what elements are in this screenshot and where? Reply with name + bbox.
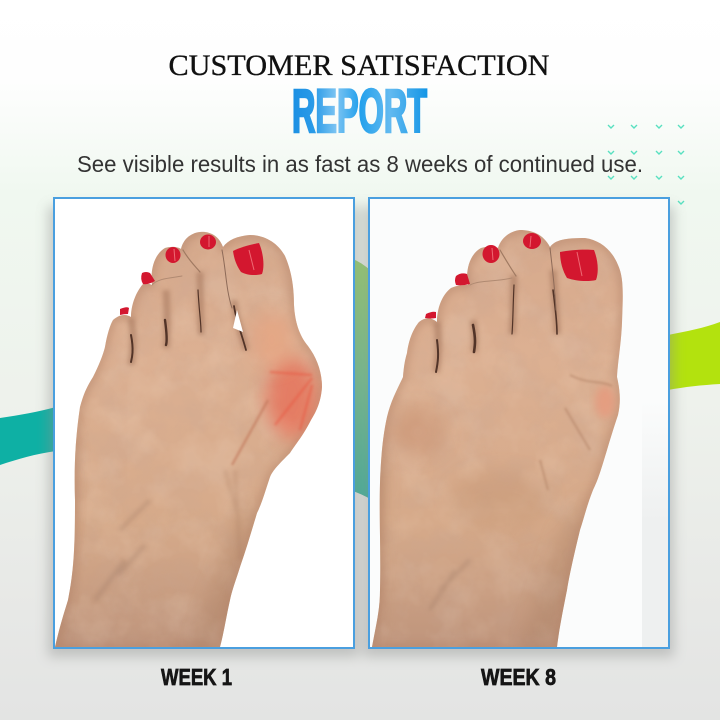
- panel: week 8: [362, 198, 669, 650]
- photo: foot with inflamed bunion: [48, 225, 330, 650]
- heading: report: REPORT: [292, 77, 427, 145]
- toenails: [425, 233, 598, 318]
- swoosh: right lime: [668, 322, 720, 390]
- panel shadows: [48, 206, 674, 657]
- toe shading: [131, 272, 246, 365]
- tagline: See visible results in as fast as 8 weeks of continued use.: [77, 151, 643, 177]
- title: CUSTOMER SATISFACTION: [168, 49, 550, 82]
- toe gaps: [436, 248, 557, 372]
- decorative chevron pattern: [608, 125, 684, 204]
- toe gaps: [131, 250, 246, 362]
- label: week 8: WEEK 8: [481, 664, 556, 690]
- toe shading: [436, 270, 557, 372]
- swoosh: middle green-teal: [350, 258, 372, 500]
- photo: foot with reduced bunion: [362, 225, 668, 650]
- toenails: [120, 234, 263, 315]
- swoosh: left teal: [0, 407, 56, 465]
- panel: week 1: [48, 198, 354, 650]
- label: week 1: WEEK 1: [161, 664, 232, 690]
